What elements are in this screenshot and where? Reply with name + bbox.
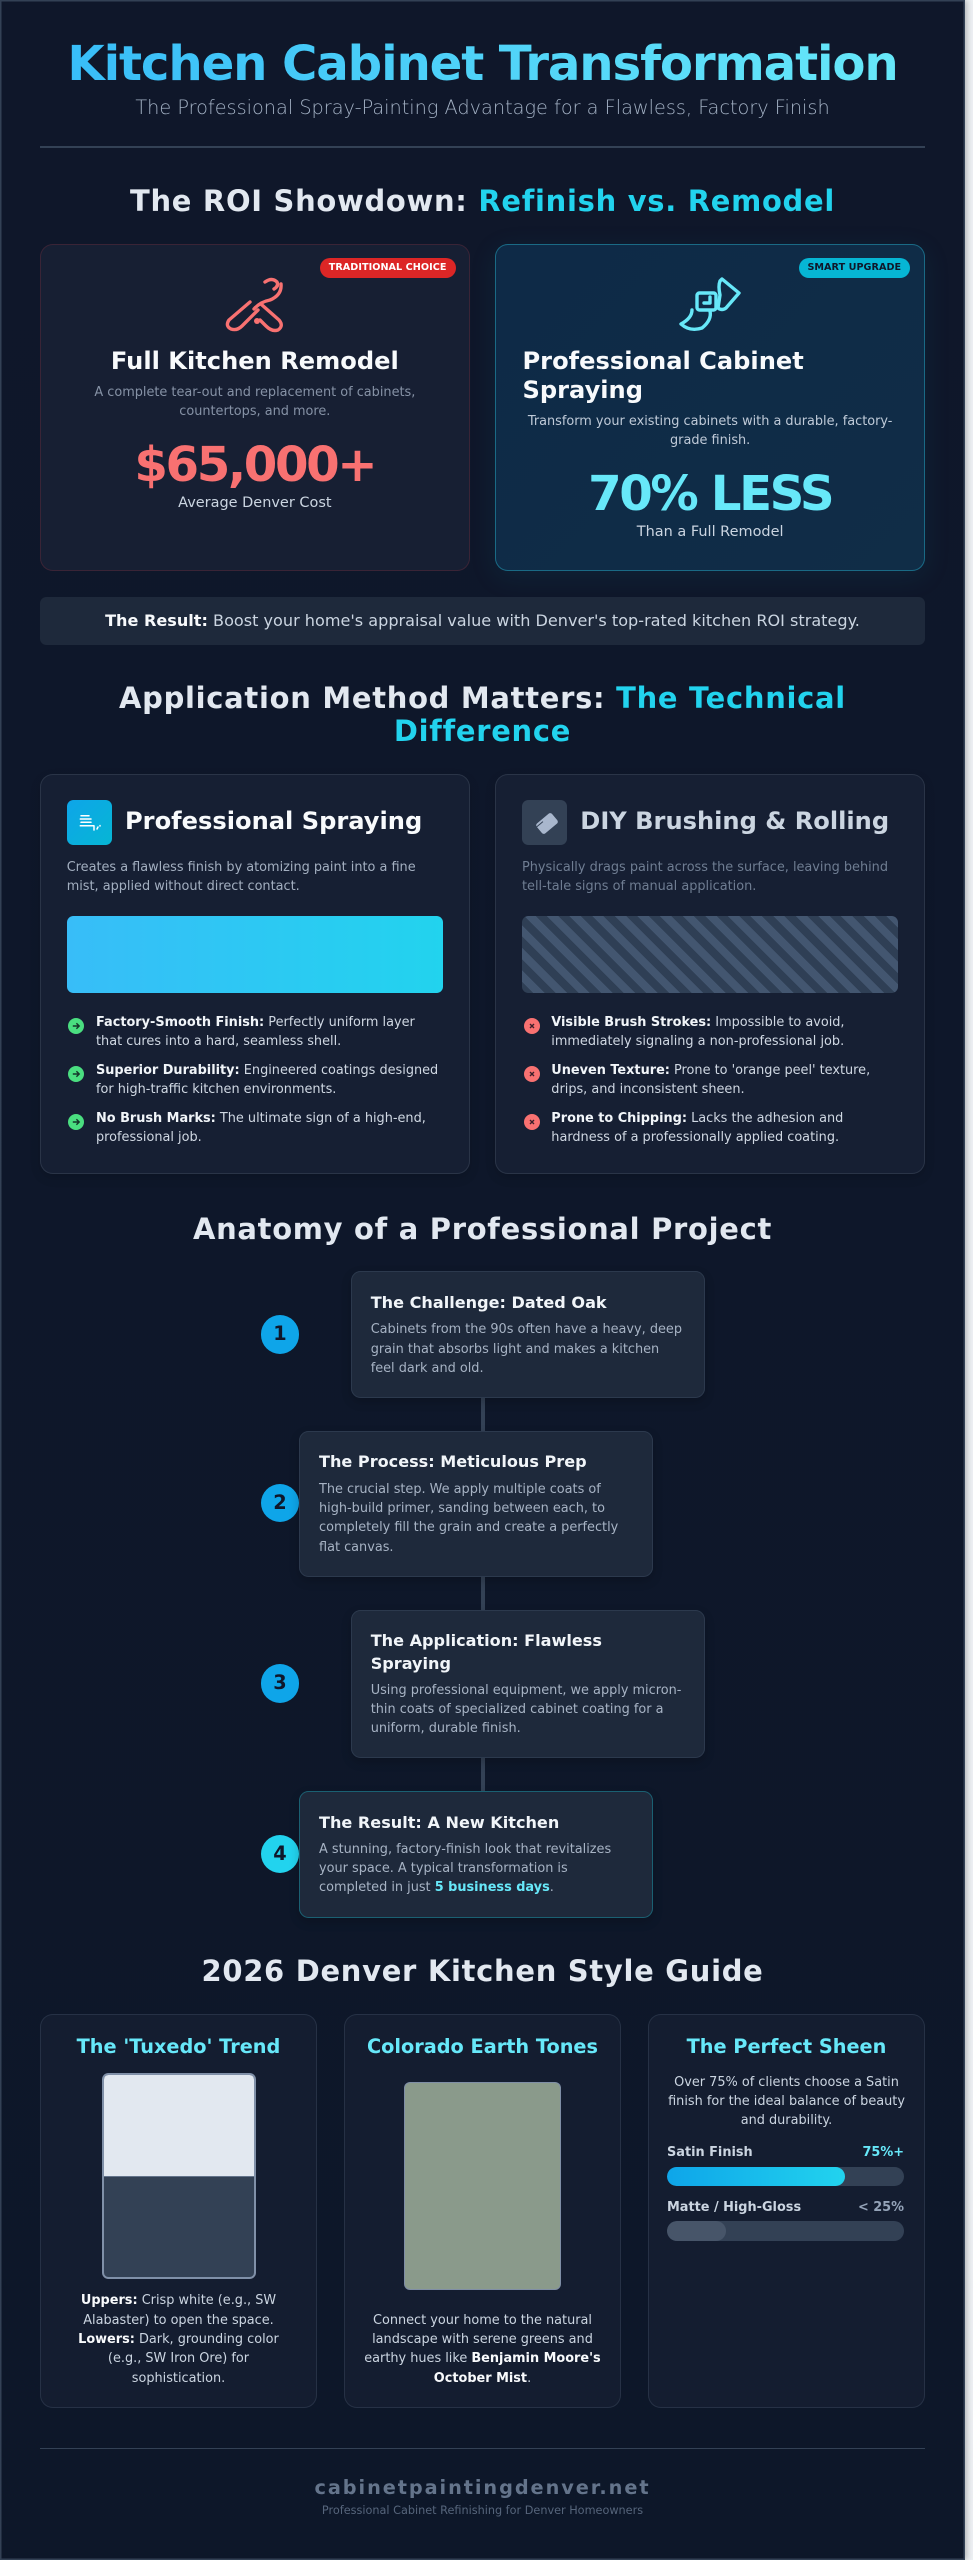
card title: [522, 347, 804, 404]
satin bar fill: [667, 2167, 845, 2186]
panel: tuxedo trend: [40, 2014, 317, 2408]
step number 4: [261, 1835, 299, 1873]
benefit text: No Brush Marks: The ultimate sign of a high-end,: [96, 1111, 426, 1126]
drawback text: drips, and inconsistent sheen.: [551, 1082, 745, 1097]
description: Transform your existing cabinets with a durable, factory-: [528, 414, 892, 429]
panel: DIY brushing and rolling: [495, 774, 925, 1174]
benefit text: [96, 1015, 415, 1049]
heading: anatomy: Anatomy of a Professional Project: [193, 1212, 772, 1246]
card title: The 'Tuxedo' Trend: [77, 2035, 280, 2058]
step description: grain that absorbs light and makes a kitchen: [371, 1342, 659, 1357]
panel: colorado earth tones: [344, 2014, 621, 2408]
step title: [370, 1631, 602, 1673]
method description: Physically drags paint across the surface, leaving behind: [522, 860, 888, 875]
heading: application method: Application Method Matters: The Technical: [119, 681, 846, 715]
matte label: [667, 2200, 904, 2215]
tuxedo description: [78, 2293, 279, 2386]
sheen description: finish for the ideal balance of beauty: [668, 2094, 905, 2109]
panel: full kitchen remodel: [40, 244, 470, 571]
benefit text: professional job.: [96, 1130, 202, 1145]
panel: perfect sheen: [648, 2014, 925, 2408]
step card: the result: [299, 1791, 653, 1918]
heading: ROI showdown: The ROI Showdown: Refinish vs. Remodel: [130, 184, 835, 218]
drawback text: [551, 1063, 870, 1097]
step description: Using professional equipment, we apply micron-: [371, 1683, 681, 1698]
step description: flat canvas.: [319, 1540, 394, 1555]
card title: Professional Cabinet: [522, 347, 804, 375]
drawback text: Visible Brush Strokes: Impossible to avoid,: [551, 1015, 845, 1030]
earth tone description: landscape with serene greens and: [372, 2332, 593, 2347]
satin label: [667, 2145, 904, 2160]
step card: the application: [351, 1610, 705, 1758]
method heading: DIY Brushing & Rolling: [580, 807, 889, 835]
step title: The Challenge: Dated Oak: [371, 1293, 607, 1312]
footer site name: cabinetpaintingdenver.net: [314, 2476, 650, 2499]
badge: traditional choice: [320, 258, 456, 278]
step description: thin coats of specialized cabinet coating for a: [371, 1702, 664, 1717]
drawback text: [551, 1015, 845, 1049]
panel: professional spraying: [40, 774, 470, 1174]
bullet icon: [68, 1018, 84, 1034]
step title: Spraying: [371, 1654, 451, 1673]
satin label: Satin Finish: [667, 2145, 753, 2160]
step description: A stunning, factory-finish look that revitalizes: [319, 1842, 611, 1857]
heading: application method: [119, 681, 846, 748]
step title: The Application: Flawless: [371, 1631, 602, 1650]
benefit text: that cures into a hard, seamless shell.: [96, 1034, 341, 1049]
description: A complete tear-out and replacement of cabinets,: [94, 385, 415, 400]
callout text: The Result: Boost your home's appraisal value with Denver's top-rated kitchen ROI strategy.: [105, 611, 860, 630]
step description: uniform, durable finish.: [371, 1721, 521, 1736]
callout: the result: [40, 597, 925, 645]
method description: Creates a flawless finish by atomizing paint into a fine: [67, 860, 416, 875]
savings figure: 70% LESS: [588, 466, 832, 522]
step number 3: [261, 1664, 299, 1703]
bullet icon: [524, 1018, 540, 1034]
satin label: 75%+: [862, 2145, 904, 2160]
step number 1: [261, 1315, 299, 1354]
benefit text: for high-traffic kitchen environments.: [96, 1082, 336, 1097]
description: countertops, and more.: [179, 404, 330, 419]
step title: The Process: Meticulous Prep: [319, 1452, 587, 1471]
method description: tell-tale signs of manual application.: [522, 879, 756, 894]
step description: completed in just 5 business days.: [319, 1880, 554, 1895]
icon: paint brush: [679, 277, 741, 331]
description: [528, 414, 892, 448]
step description: feel dark and old.: [371, 1361, 484, 1376]
step description: [371, 1322, 682, 1376]
step card: the process: [299, 1430, 653, 1576]
bullet icon: [524, 1114, 540, 1130]
step title: The Result: A New Kitchen: [319, 1813, 559, 1832]
earth tone description: Connect your home to the natural: [373, 2313, 592, 2328]
step description: Cabinets from the 90s often have a heavy, deep: [371, 1322, 682, 1337]
earth tone description: October Mist.: [434, 2371, 531, 2386]
matte bar: [667, 2221, 904, 2241]
benefit text: [96, 1063, 438, 1097]
step description: high-build primer, sanding between each, to: [319, 1501, 605, 1516]
step description: your space. A typical transformation is: [319, 1861, 568, 1876]
badge: smart upgrade: SMART UPGRADE: [807, 262, 901, 273]
icon: spray: [67, 800, 112, 845]
tuxedo description: (e.g., SW Iron Ore) for: [108, 2351, 249, 2366]
matte bar fill: [667, 2221, 726, 2241]
panel: professional cabinet spraying: [495, 244, 925, 571]
step number 1: 1: [273, 1322, 287, 1345]
bullet icon: [68, 1114, 84, 1130]
matte label: Matte / High-Gloss: [667, 2200, 801, 2215]
step description: The crucial step. We apply multiple coats of: [319, 1482, 601, 1497]
method description: [67, 860, 416, 894]
method description: mist, applied without direct contact.: [67, 879, 300, 894]
step number 2: [261, 1484, 299, 1522]
benefit text: Superior Durability: Engineered coatings designed: [96, 1063, 438, 1078]
badge: smart upgrade: [799, 258, 910, 278]
savings caption: Than a Full Remodel: [637, 524, 784, 540]
badge: traditional choice: TRADITIONAL CHOICE: [329, 262, 446, 273]
step description: [318, 1482, 618, 1555]
benefit text: [96, 1111, 426, 1145]
footer tagline: Professional Cabinet Refinishing for Denver Homeowners: [322, 2504, 643, 2517]
subtitle: The Professional Spray-Painting Advantage for a Flawless, Factory Finish: [135, 96, 830, 119]
earth tone swatch: [405, 2083, 560, 2289]
satin bar: [667, 2167, 904, 2186]
heading: style guide: 2026 Denver Kitchen Style Guide: [201, 1954, 764, 1988]
earth tone description: earthy hues like Benjamin Moore's: [364, 2351, 601, 2366]
earth tone description: [364, 2313, 601, 2386]
tuxedo description: Alabaster) to open the space.: [83, 2313, 274, 2328]
description: grade finish.: [670, 433, 750, 448]
bullet icon: [68, 1066, 84, 1082]
card title: The Perfect Sheen: [687, 2035, 886, 2058]
bullet icon: [524, 1066, 540, 1082]
method heading: Professional Spraying: [125, 807, 422, 835]
footer: [314, 2476, 650, 2517]
benefit text: Factory-Smooth Finish: Perfectly uniform layer: [96, 1015, 415, 1030]
card title: Colorado Earth Tones: [367, 2035, 598, 2058]
step description: [319, 1842, 611, 1895]
drawback text: hardness of a professionally applied coating.: [551, 1130, 839, 1145]
title: Kitchen Cabinet Transformation: [67, 36, 898, 92]
card title: Spraying: [522, 376, 643, 404]
icon: eraser: [522, 800, 567, 845]
drawback text: [551, 1111, 843, 1145]
matte label: < 25%: [858, 2200, 904, 2215]
brush stroke swatch: [522, 916, 898, 993]
price: $65,000+: [134, 437, 375, 493]
icon: crossed tools: [226, 278, 283, 332]
step card: the challenge: [351, 1271, 705, 1398]
tuxedo description: Uppers: Crisp white (e.g., SW: [81, 2293, 276, 2308]
step number 3: 3: [273, 1671, 287, 1694]
tuxedo description: Lowers: Dark, grounding color: [78, 2332, 279, 2347]
uppers colour: [104, 2075, 254, 2177]
heading: application method: Difference: [394, 714, 571, 748]
drawback text: Prone to Chipping: Lacks the adhesion and: [551, 1111, 843, 1126]
sheen description: [668, 2075, 905, 2128]
step description: [371, 1683, 681, 1736]
card title: Full Kitchen Remodel: [111, 347, 399, 375]
drawback text: immediately signaling a non-professional job.: [551, 1034, 844, 1049]
price caption: Average Denver Cost: [178, 495, 332, 511]
description: [94, 385, 415, 419]
drawback text: Uneven Texture: Prone to 'orange peel' texture,: [551, 1063, 870, 1078]
method description: [522, 860, 888, 894]
sheen description: Over 75% of clients choose a Satin: [674, 2075, 899, 2090]
step description: completely fill the grain and create a perfectly: [319, 1520, 618, 1535]
step number 4: 4: [273, 1842, 287, 1865]
step number 2: 2: [273, 1491, 287, 1514]
timeline connector: [480, 1390, 484, 1800]
sheen description: and durability.: [741, 2113, 832, 2128]
tuxedo swatch: [102, 2073, 256, 2279]
header: [67, 36, 898, 119]
smooth finish swatch: [67, 916, 443, 993]
tuxedo description: sophistication.: [132, 2371, 225, 2386]
